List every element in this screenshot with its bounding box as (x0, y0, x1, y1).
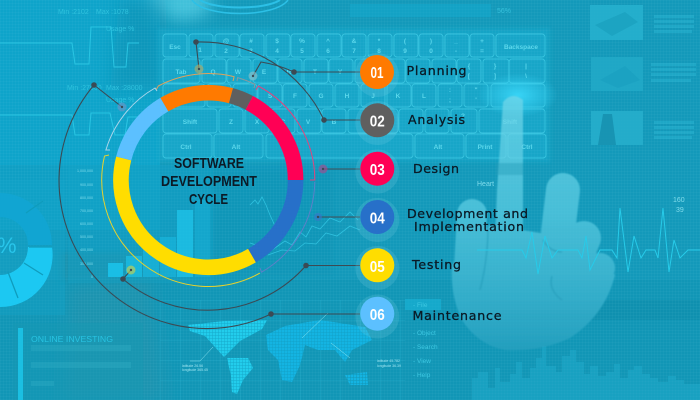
keyboard labels: Ctrl (521, 144, 533, 151)
top decorative gauge and progress bar (192, 0, 511, 17)
world map: latitude 45.782 (377, 359, 400, 363)
keyboard labels: T (313, 69, 317, 76)
keyboard labels: L (422, 93, 426, 100)
bar chart centre left: 600,000 (80, 222, 93, 226)
keyboard labels: Esc (169, 44, 181, 51)
usage charts top left: Min :2102 (58, 9, 89, 16)
segment: planning (164, 93, 231, 105)
segment: design (249, 103, 296, 180)
keyboard labels: % (299, 38, 305, 45)
keyboard labels: : (449, 87, 451, 94)
step 03 design: 03 (370, 162, 385, 179)
keyboard labels: } (494, 63, 497, 70)
keyboard labels: 9 (403, 48, 407, 55)
bar chart centre left: 900,000 (80, 183, 93, 187)
step 04 development and implementation: 04 (370, 210, 385, 228)
keyboard labels: ; (449, 97, 451, 104)
keyboard labels: F (293, 93, 297, 100)
step 04 development and implementation (355, 198, 528, 242)
file menu: - View (413, 358, 431, 365)
step 06 maintenance: 06 (370, 307, 385, 324)
donut gauge bottom left (0, 180, 65, 315)
keyboard labels: [ (468, 73, 471, 80)
keyboard labels: V (306, 119, 311, 126)
keyboard labels: Q (210, 69, 216, 76)
usage charts top left: Min :27000 (67, 85, 102, 92)
keyboard labels: 4 (275, 48, 279, 55)
usage charts top left: Usage % (106, 26, 134, 33)
world map (160, 300, 405, 400)
ring title: SOFTWARE (174, 155, 244, 172)
keyboard labels: _ (453, 38, 458, 45)
usage charts top left: Max :28000 (106, 85, 143, 92)
thin outer arcs (102, 74, 315, 286)
bar chart centre left: 500,000 (80, 235, 93, 239)
keyboard labels: 1 (198, 47, 202, 54)
step 05 testing: Testing (411, 257, 461, 272)
keyboard labels: \ (525, 73, 527, 80)
connector: development (314, 213, 360, 221)
thumbnails and article text (590, 5, 696, 145)
step 01 planning (355, 53, 466, 97)
step 03 design (355, 150, 459, 194)
segment: testing (121, 158, 252, 267)
keyboard labels: $ (275, 38, 279, 45)
heart rate line: Heart (477, 181, 494, 188)
keyboard labels: 7 (352, 48, 356, 55)
keyboard labels: X (255, 119, 260, 126)
top decorative gauge and progress bar: 56% (497, 8, 511, 15)
keyboard labels: + (480, 38, 484, 45)
keyboard labels: ' (475, 97, 477, 104)
world map: longitude 365.45 (182, 368, 208, 372)
keyboard labels: H (345, 93, 350, 100)
keyboard labels: 6 (326, 48, 330, 55)
keyboard labels: Z (229, 119, 233, 126)
ring title (161, 155, 257, 208)
bottom right bars (472, 346, 700, 400)
cycle ring (121, 93, 296, 267)
keyboard labels: { (468, 63, 471, 70)
keyboard labels: # (249, 38, 253, 45)
keyboard labels: ^ (326, 37, 330, 45)
step 04 development and implementation: Implementation (414, 219, 524, 234)
keyboard labels: 2 (224, 48, 228, 55)
keyboard labels: Shift (183, 119, 198, 126)
file menu (405, 299, 441, 379)
keyboard labels: G (318, 93, 324, 100)
connector lines (59, 39, 360, 329)
step 05 testing: 05 (370, 259, 385, 276)
world map: longitude 36.39 (377, 364, 401, 368)
file menu: - Help (413, 372, 431, 379)
usage charts top left (0, 9, 143, 135)
keyboard labels: 0 (429, 48, 433, 55)
keyboard labels: W (235, 69, 242, 76)
online investing panel: ONLINE INVESTING (31, 334, 113, 344)
keyboard labels: " (474, 87, 478, 94)
step 04 development and implementation: Development and (407, 206, 528, 221)
bar chart centre left (68, 165, 213, 283)
keyboard labels: R (287, 69, 292, 76)
segment: maintenance (124, 105, 164, 158)
segment: development (252, 180, 296, 256)
connector: design (318, 164, 360, 174)
connector: analysis (193, 39, 360, 123)
keyboard labels: Ctrl (180, 144, 192, 151)
connector: maintenance (59, 82, 360, 329)
keyboard labels: & (352, 38, 357, 45)
connector: testing (120, 263, 360, 310)
keyboard labels: 8 (377, 48, 381, 55)
keyboard labels: Backspace (504, 44, 538, 51)
ring title: DEVELOPMENT (161, 173, 257, 190)
world map: latitude 26.56 (182, 364, 203, 368)
bar chart centre left: 1,000,000 (77, 169, 93, 173)
keyboard labels: Y (338, 69, 343, 76)
usage charts top left: Max :1078 (96, 9, 129, 16)
keyboard labels: Print (478, 144, 493, 151)
keyboard labels: | (525, 63, 527, 70)
bar chart centre left: 700,000 (80, 209, 93, 213)
step 02 analysis: Analysis (408, 112, 465, 127)
online investing panel (13, 323, 143, 400)
keyboard labels: Alt (434, 144, 443, 151)
keyboard labels: ( (404, 38, 407, 45)
file menu: - Object (413, 330, 436, 337)
heart rate line: 39 (676, 207, 684, 214)
heart rate line: 160 (673, 197, 685, 204)
bar chart centre left: 300,000 (80, 262, 93, 266)
keyboard labels: C (281, 119, 286, 126)
connector: planning (248, 62, 360, 80)
step 02 analysis (355, 101, 465, 145)
step 06 maintenance: Maintenance (412, 308, 502, 323)
keyboard labels: B (332, 119, 337, 126)
bar chart centre left: 400,000 (80, 248, 93, 252)
keyboard labels: Shift (503, 119, 518, 126)
keyboard labels (169, 37, 538, 151)
keyboard labels: ? (461, 113, 465, 120)
keyboard labels: ] (494, 73, 496, 80)
stock chart lines (250, 197, 360, 255)
step 05 testing (355, 246, 461, 290)
step 01 planning: 01 (370, 65, 384, 82)
keyboard labels: = (480, 48, 484, 55)
keyboard labels: S (268, 93, 273, 100)
keyboard labels: E (262, 69, 267, 76)
keyboard labels: Tab (175, 69, 187, 76)
keyboard labels: ) (430, 38, 432, 45)
hand (452, 96, 615, 350)
keyboard (163, 34, 546, 158)
keyboard labels: * (378, 38, 381, 45)
step 03 design: Design (413, 161, 459, 176)
keyboard labels: - (455, 48, 457, 55)
keyboard labels: Alt (232, 144, 241, 151)
keyboard labels: 5 (300, 48, 304, 55)
ring title: CYCLE (189, 191, 228, 208)
usage charts top left: Usage % (106, 97, 134, 104)
keyboard labels: @ (223, 38, 229, 45)
keyboard labels: J (371, 93, 375, 100)
file menu: - File (413, 302, 428, 309)
bar chart centre left: 0 (91, 275, 93, 279)
step 02 analysis: 02 (370, 114, 385, 130)
keyboard labels: 3 (249, 48, 253, 55)
step 01 planning: Planning (406, 63, 466, 78)
heart rate line (477, 181, 700, 274)
bar chart centre left: 800,000 (80, 196, 93, 200)
enter key glow (478, 73, 558, 117)
keyboard labels: K (396, 93, 401, 100)
step 06 maintenance (355, 294, 502, 338)
file menu: - Search (413, 344, 438, 351)
segment: analysis (231, 96, 249, 103)
